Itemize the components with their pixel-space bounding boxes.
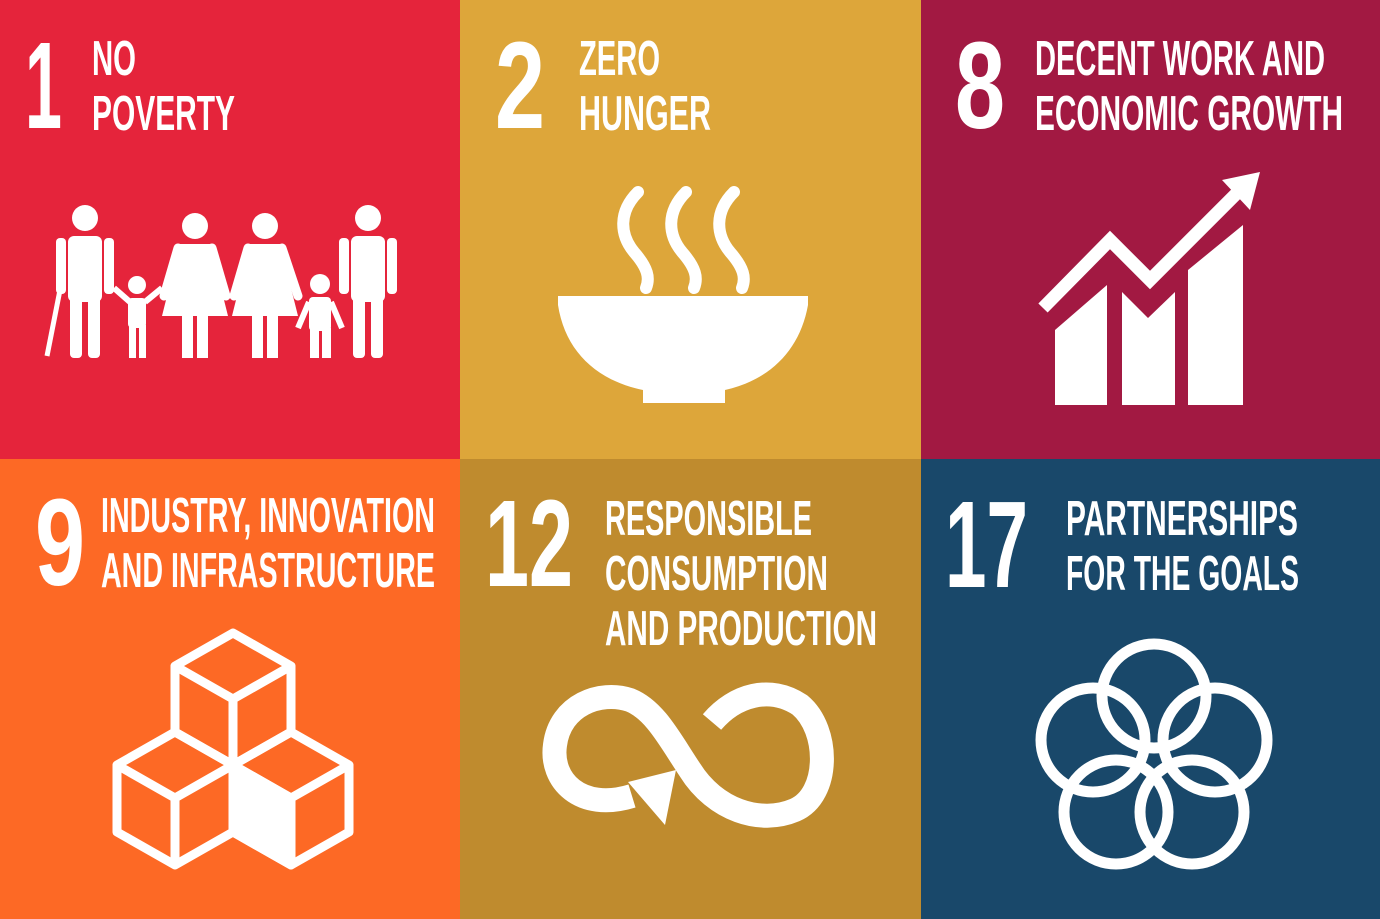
icon: growth chart — [1043, 172, 1260, 405]
panel: partnerships — [921, 459, 1380, 919]
heading: zero hunger: ZERO — [579, 32, 660, 86]
heading: decent work — [1035, 32, 1343, 141]
heading: responsible consumption: RESPONSIBLE — [605, 492, 812, 546]
heading: responsible consumption: CONSUMPTION — [605, 547, 828, 601]
heading: no poverty — [92, 32, 235, 141]
panel: decent work — [921, 0, 1380, 459]
panel: responsible consumption — [460, 459, 921, 919]
icon: cubes — [117, 633, 349, 865]
heading: partnerships — [1066, 492, 1299, 601]
heading: no poverty: POVERTY — [92, 87, 235, 141]
heading: no poverty: NO — [92, 32, 136, 86]
icon: bowl — [558, 192, 808, 403]
heading: zero hunger: HUNGER — [579, 87, 711, 141]
icon: infinity arrow — [554, 694, 822, 825]
panel: no poverty — [0, 0, 460, 459]
panel: zero hunger — [460, 0, 921, 459]
heading: zero hunger — [579, 32, 711, 141]
heading: responsible consumption — [605, 492, 877, 656]
icon: rings — [1041, 644, 1267, 864]
heading: industry — [101, 489, 435, 598]
number 17: 17 — [945, 477, 1028, 614]
number 8: 8 — [955, 18, 1005, 155]
number 2: 2 — [495, 18, 545, 155]
icon: family — [47, 205, 397, 358]
heading: industry: INDUSTRY, INNOVATION — [101, 489, 435, 543]
number 12: 12 — [485, 476, 573, 613]
panel: industry — [0, 459, 460, 919]
number 9: 9 — [35, 475, 85, 612]
heading: industry: AND INFRASTRUCTURE — [101, 544, 435, 598]
number 1: 1 — [25, 18, 62, 155]
heading: responsible consumption: AND PRODUCTION — [605, 602, 877, 656]
